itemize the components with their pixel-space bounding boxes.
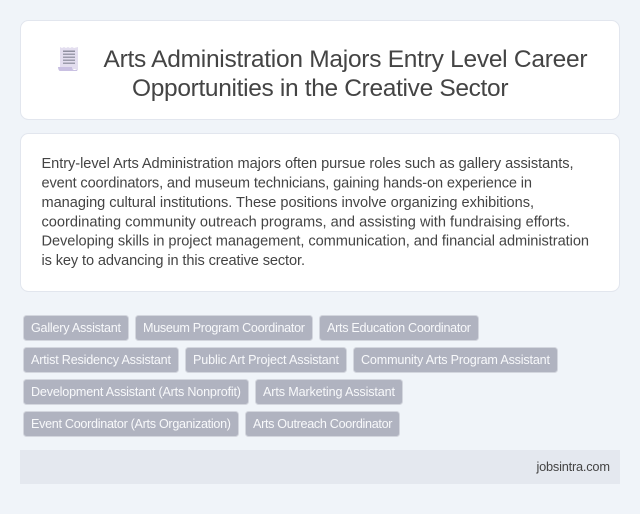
- tag: Arts Outreach Coordinator: [246, 412, 400, 436]
- tag: Event Coordinator (Arts Organization): Event Coordinator (Arts Organization): [31, 417, 231, 431]
- footer bar: [20, 450, 620, 484]
- tag: Artist Residency Assistant: Artist Residency Assistant: [31, 353, 172, 367]
- tag: Museum Program Coordinator: Museum Program Coordinator: [143, 321, 305, 335]
- footer source text: jobsintra.com: [536, 459, 610, 474]
- tag: Gallery Assistant: [24, 316, 128, 340]
- tag: Development Assistant (Arts Nonprofit): [24, 380, 248, 404]
- tag: Development Assistant (Arts Nonprofit): Development Assistant (Arts Nonprofit): [31, 385, 241, 399]
- description text: managing cultural institutions. These positions involve organizing exhibitions,: [42, 195, 534, 211]
- panel: description card: [20, 134, 620, 292]
- description text: is key to advancing in this creative sector.: [42, 253, 305, 269]
- tag: Community Arts Program Assistant: Community Arts Program Assistant: [361, 353, 550, 367]
- icon: document scroll: [58, 47, 78, 71]
- tag: Museum Program Coordinator: [136, 316, 312, 340]
- title: Opportunities in the Creative Sector: [132, 75, 508, 102]
- tag: Community Arts Program Assistant: [354, 348, 558, 372]
- title: [104, 46, 588, 102]
- description text: event coordinators, and museum technicians, gaining hands-on experience in: [42, 176, 532, 192]
- description text: Developing skills in project management, communication, and financial administration: [42, 234, 589, 250]
- tag: Arts Marketing Assistant: Arts Marketing Assistant: [263, 385, 396, 399]
- description text: Entry-level Arts Administration majors often pursue roles such as gallery assistants,: [42, 156, 574, 172]
- panel: title card: [20, 20, 620, 120]
- tag: Arts Education Coordinator: Arts Education Coordinator: [327, 321, 471, 335]
- description text: [42, 156, 589, 269]
- tag: Arts Education Coordinator: [320, 316, 478, 340]
- tag: Arts Outreach Coordinator: Arts Outreach Coordinator: [253, 417, 392, 431]
- title: Arts Administration Majors Entry Level Career: [104, 46, 588, 73]
- tag: Public Art Project Assistant: Public Art Project Assistant: [193, 353, 340, 367]
- tag: Arts Marketing Assistant: [256, 380, 402, 404]
- description text: coordinating community outreach programs, and assisting with fundraising efforts.: [42, 214, 570, 230]
- tag: Artist Residency Assistant: [24, 348, 178, 372]
- tag: Gallery Assistant: Gallery Assistant: [31, 321, 122, 335]
- tag list: [24, 316, 558, 436]
- tag: Event Coordinator (Arts Organization): [24, 412, 238, 436]
- tag: Public Art Project Assistant: [186, 348, 346, 372]
